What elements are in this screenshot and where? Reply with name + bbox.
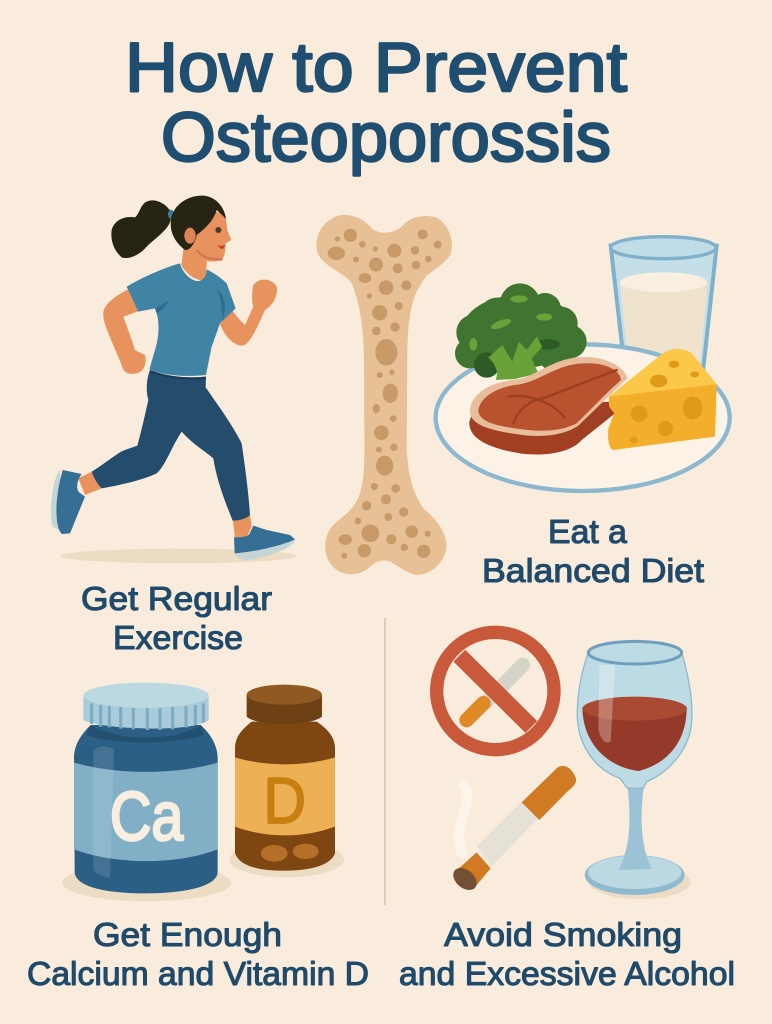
label: calcium and vitamin D: Calcium and Vitamin D [27, 955, 369, 992]
label: balanced diet [482, 513, 704, 589]
label: avoid smoking and alcohol: Avoid Smoking [444, 916, 682, 953]
no smoking sign [437, 632, 554, 750]
illustration: no smoking, cigarette and wine [437, 632, 692, 899]
label: balanced diet: Eat a [548, 513, 628, 550]
label: avoid smoking and alcohol [399, 916, 735, 992]
calcium jar [62, 683, 231, 901]
vitamin D bottle: D [263, 764, 306, 837]
vitamin D bottle [229, 685, 344, 877]
title: How to Prevent [125, 28, 627, 106]
glass of milk [611, 237, 717, 368]
label: calcium and vitamin D: Get Enough [93, 916, 282, 953]
illustration: supplement bottles [62, 683, 344, 901]
label: balanced diet: Balanced Diet [482, 552, 704, 589]
illustration: porous bone [316, 215, 452, 575]
illustration: runner [51, 196, 297, 563]
label: regular exercise [81, 580, 272, 656]
label: calcium and vitamin D [27, 916, 369, 992]
calcium jar: Ca [110, 779, 183, 855]
title [125, 28, 627, 176]
title: Osteoporossis [161, 98, 611, 176]
label: regular exercise: Get Regular [81, 580, 272, 617]
plate [436, 344, 730, 491]
label: regular exercise: Exercise [113, 619, 243, 656]
illustration: balanced meal with milk [436, 237, 730, 491]
cheese [608, 349, 717, 450]
steak [469, 357, 627, 455]
broccoli [455, 283, 587, 380]
label: avoid smoking and alcohol: and Excessive Alcohol [399, 955, 735, 992]
cigarette [449, 766, 576, 894]
wine glass [577, 641, 692, 899]
